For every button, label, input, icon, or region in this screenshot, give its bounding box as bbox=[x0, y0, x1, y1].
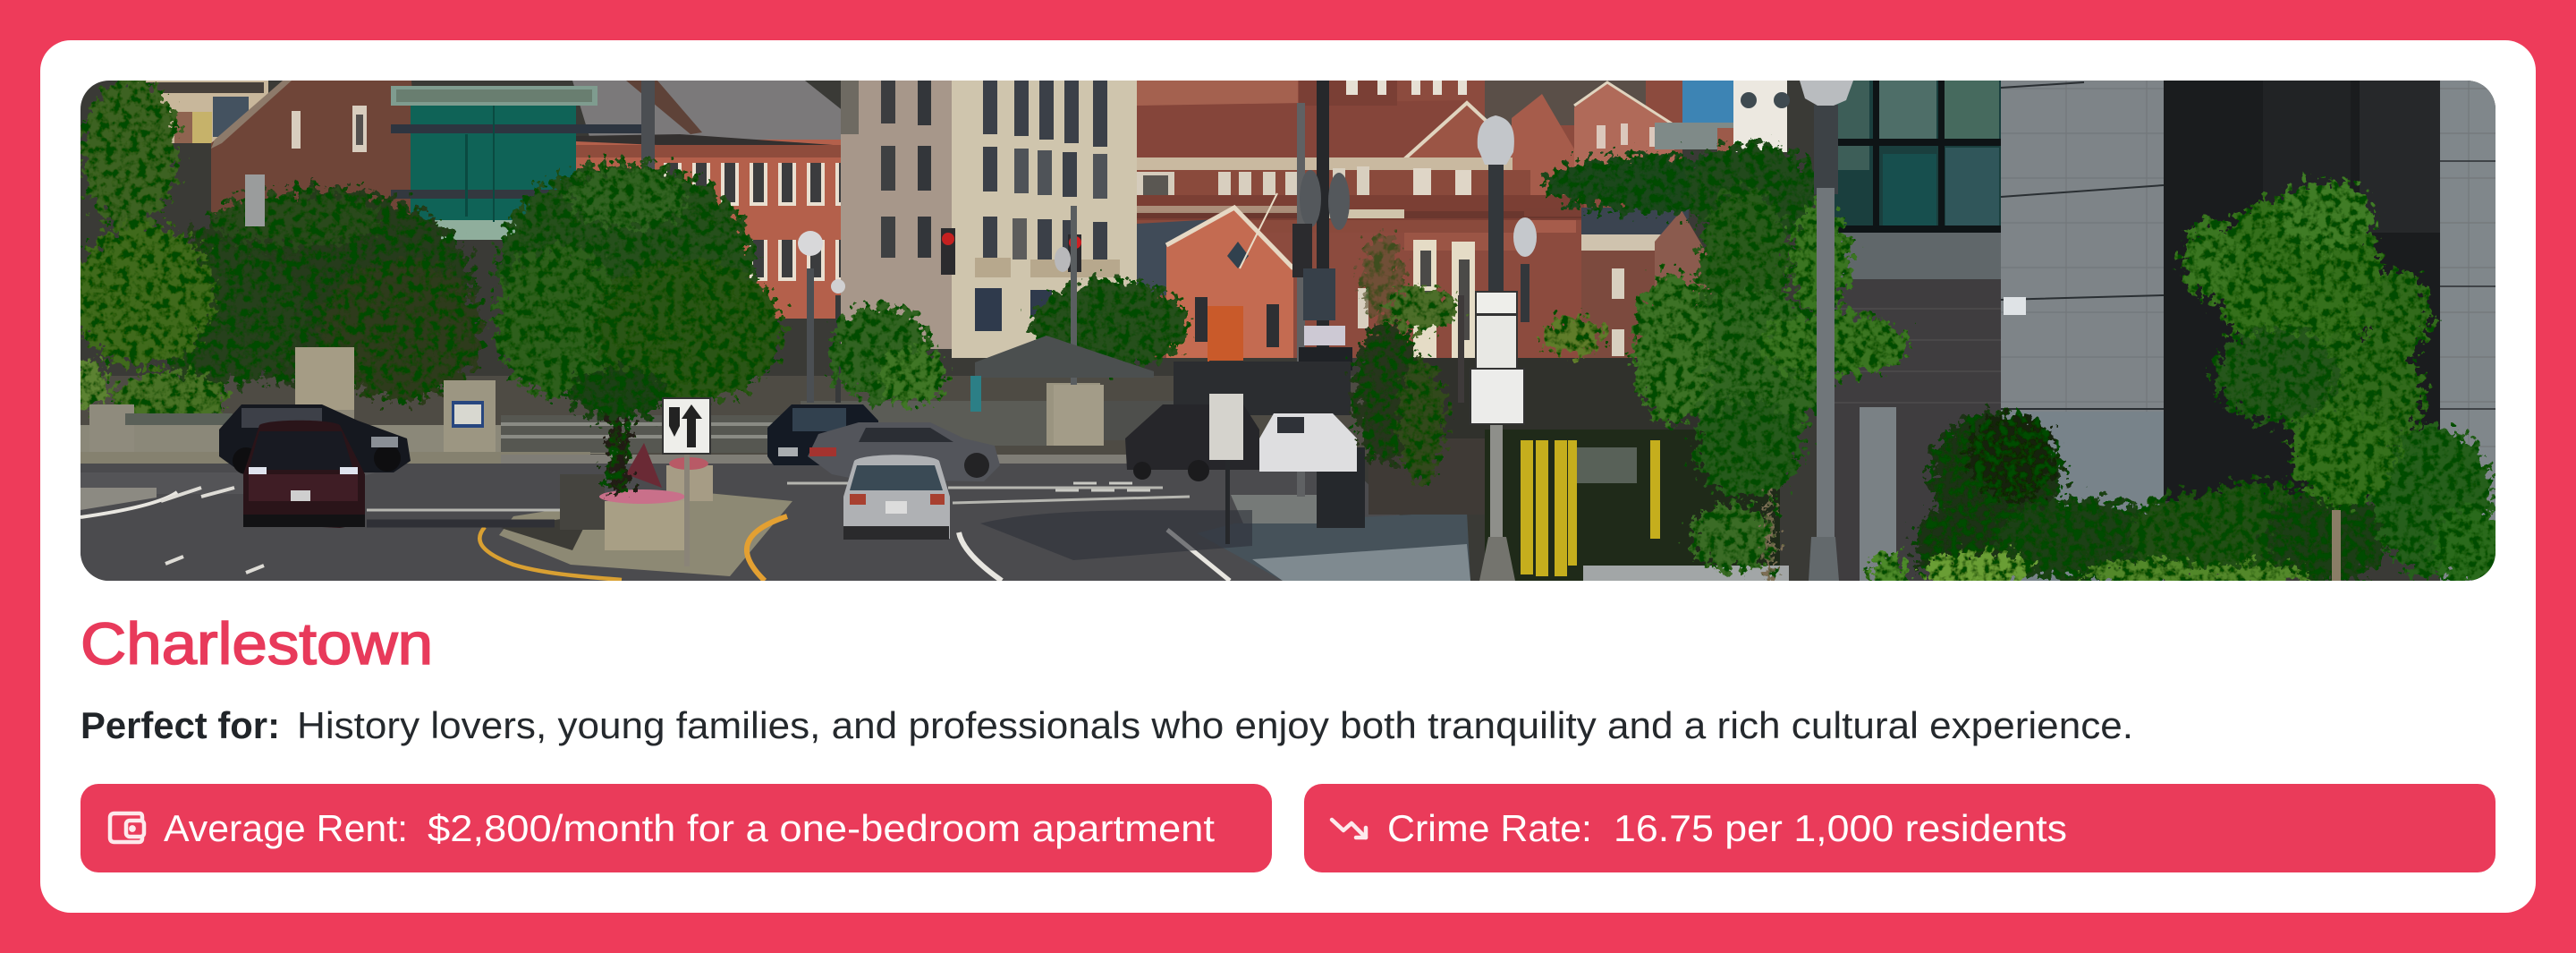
grey slate roof bbox=[572, 81, 841, 140]
foreground cars bbox=[219, 404, 1000, 540]
bridge wall and pillars bbox=[80, 347, 1100, 454]
orange gable building bbox=[1137, 193, 1293, 358]
traffic signal, left bbox=[245, 174, 265, 226]
sky bbox=[1682, 81, 1733, 123]
tree: far right bbox=[2182, 181, 2431, 506]
tree: right-centre by lamp bbox=[1632, 188, 1910, 582]
left background buildings bbox=[134, 81, 420, 215]
icon: trending down bbox=[1332, 820, 1366, 838]
gantry of signs and poles bbox=[1208, 81, 1365, 528]
keep-right road sign bbox=[663, 398, 710, 566]
chip: crime rate: 16.75 per 1,000 residents bbox=[1614, 807, 2067, 849]
photo: Charlestown street scene bbox=[72, 76, 2504, 595]
title: Charlestown bbox=[80, 610, 433, 676]
road surface bbox=[80, 458, 1467, 581]
black SUV bbox=[219, 404, 411, 474]
planters and flowers bbox=[560, 443, 713, 550]
icon: wallet bbox=[110, 813, 144, 842]
grey stone facade bbox=[2001, 81, 2164, 582]
blue SUV bbox=[767, 404, 878, 465]
maroon SUV bbox=[243, 421, 365, 528]
lamp post and trees mid-left bbox=[798, 231, 845, 403]
sidewalk right of road bbox=[1224, 515, 1470, 580]
beige office building bbox=[841, 81, 1138, 358]
white-out sign pillar and lamp centre bbox=[1458, 115, 1537, 581]
trees: left dark foliage bbox=[72, 76, 483, 425]
chip: crime rate: Crime Rate: bbox=[1387, 807, 1592, 849]
chip: crime rate bbox=[1304, 784, 2496, 872]
wall and dark shrubs behind fence bbox=[1368, 358, 1789, 581]
orange brick building bbox=[576, 134, 841, 319]
dark louvred facade bbox=[2164, 81, 2441, 501]
chip: average rent: Average Rent: bbox=[164, 807, 408, 849]
pavilion bbox=[970, 336, 1154, 412]
silver sedan bbox=[843, 455, 950, 540]
chip: average rent: $2,800/month for a one-bedroom apartment bbox=[428, 807, 1215, 849]
grey sedan bbox=[808, 422, 1000, 481]
traffic lights on beige building bbox=[941, 206, 1104, 446]
green highway sign gantry bbox=[391, 81, 655, 251]
glass and building, right bbox=[1825, 81, 2004, 583]
bus and vehicles behind signs bbox=[1125, 362, 1357, 481]
text block: perfect for: History lovers, young families, and professionals who enjoy both tranquility and a rich cultural experience. bbox=[297, 704, 2133, 746]
grey stone right edge bbox=[2440, 81, 2496, 582]
low shrubs, right bbox=[1869, 412, 2504, 595]
tree: centre large bbox=[495, 161, 783, 492]
clock tower bbox=[1655, 81, 1790, 152]
mid-ground road level backdrop bbox=[80, 376, 1422, 456]
trees right of centre top bbox=[1543, 143, 1820, 242]
do not block sign bbox=[1209, 394, 1243, 544]
lamp post right bbox=[1800, 81, 1853, 581]
traffic island and lane markings bbox=[80, 483, 1230, 581]
red brick civic buildings bbox=[1137, 81, 1726, 374]
chip: average rent bbox=[80, 784, 1272, 872]
yellow bollards bbox=[1521, 440, 1660, 576]
text block: perfect for: Perfect for: bbox=[80, 704, 280, 746]
young trees near lamp bbox=[1352, 233, 1771, 571]
road shadow bbox=[980, 510, 1252, 560]
